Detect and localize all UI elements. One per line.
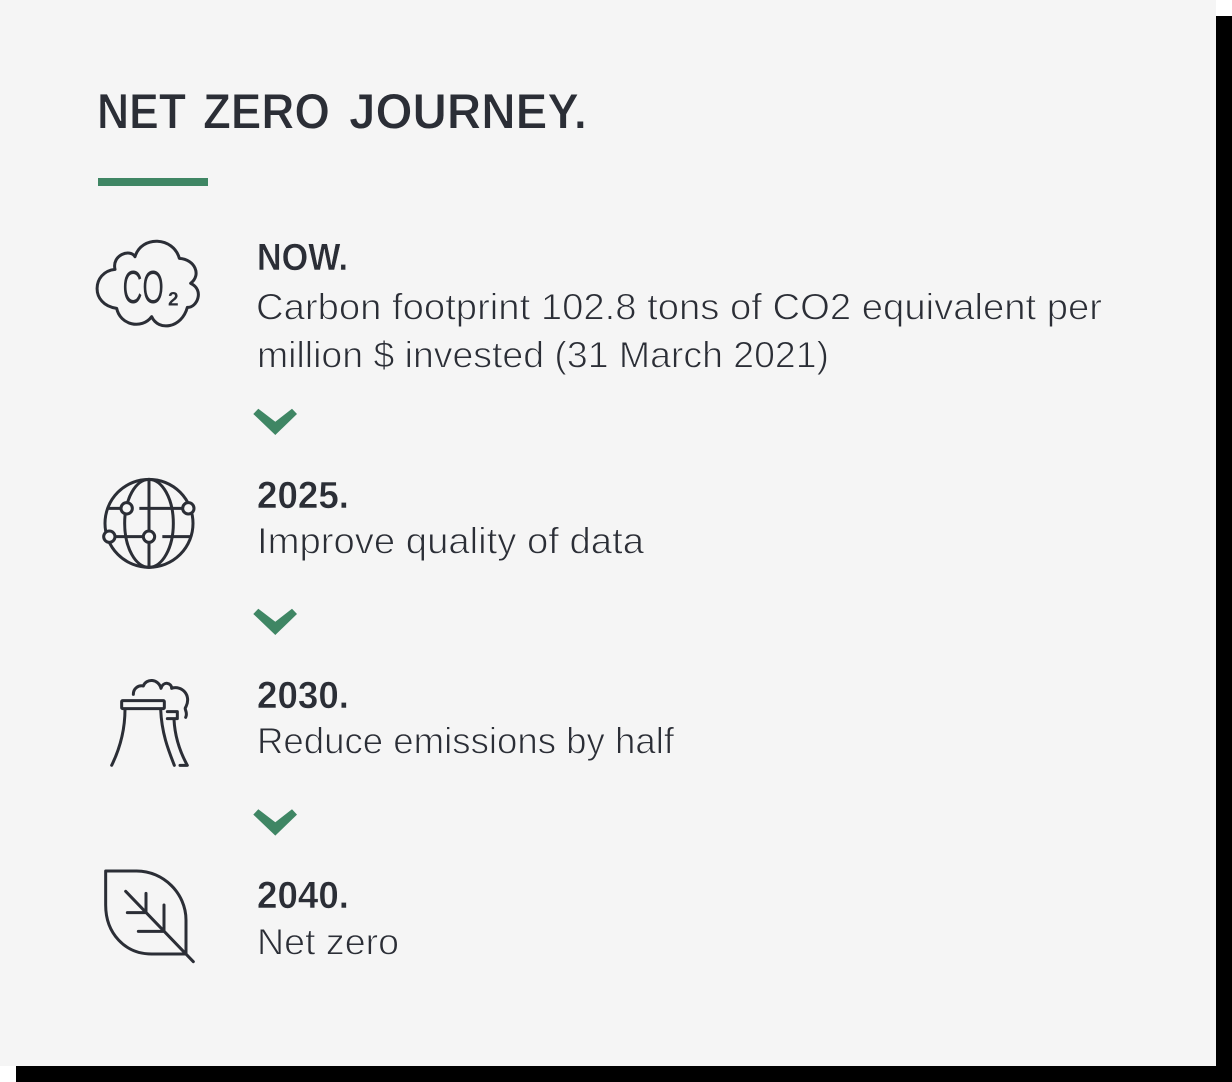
icon: CO2 cloud: CO <box>122 263 164 314</box>
arrow: chevron 1 <box>253 409 297 435</box>
heading: now: NOW. <box>257 237 348 279</box>
icon: globe <box>104 479 194 567</box>
title underline <box>98 178 208 186</box>
title: ZERO <box>203 84 330 140</box>
icon: power plant <box>112 681 188 765</box>
arrow: chevron 3 <box>253 809 297 836</box>
text: improve quality of data: Improve quality of data <box>257 520 644 562</box>
text: carbon footprint line 1: Carbon footprint 102.8 tons of CO2 equivalent per <box>256 286 1102 328</box>
icon: CO2 cloud <box>97 241 198 326</box>
text: net zero: Net zero <box>257 920 399 962</box>
title: JOURNEY. <box>349 84 587 140</box>
icon: leaf <box>106 871 193 962</box>
icon: CO2 cloud: 2 <box>168 290 179 310</box>
text: reduce emissions by half: Reduce emissions by half <box>257 720 675 762</box>
arrow: chevron 2 <box>253 609 297 635</box>
heading: 2030: 2030. <box>257 675 349 717</box>
heading: 2040: 2040. <box>257 875 349 917</box>
heading: 2025: 2025. <box>257 475 349 517</box>
title: NET <box>97 84 186 140</box>
text: carbon footprint line 2: million $ invested (31 March 2021) <box>257 334 829 376</box>
